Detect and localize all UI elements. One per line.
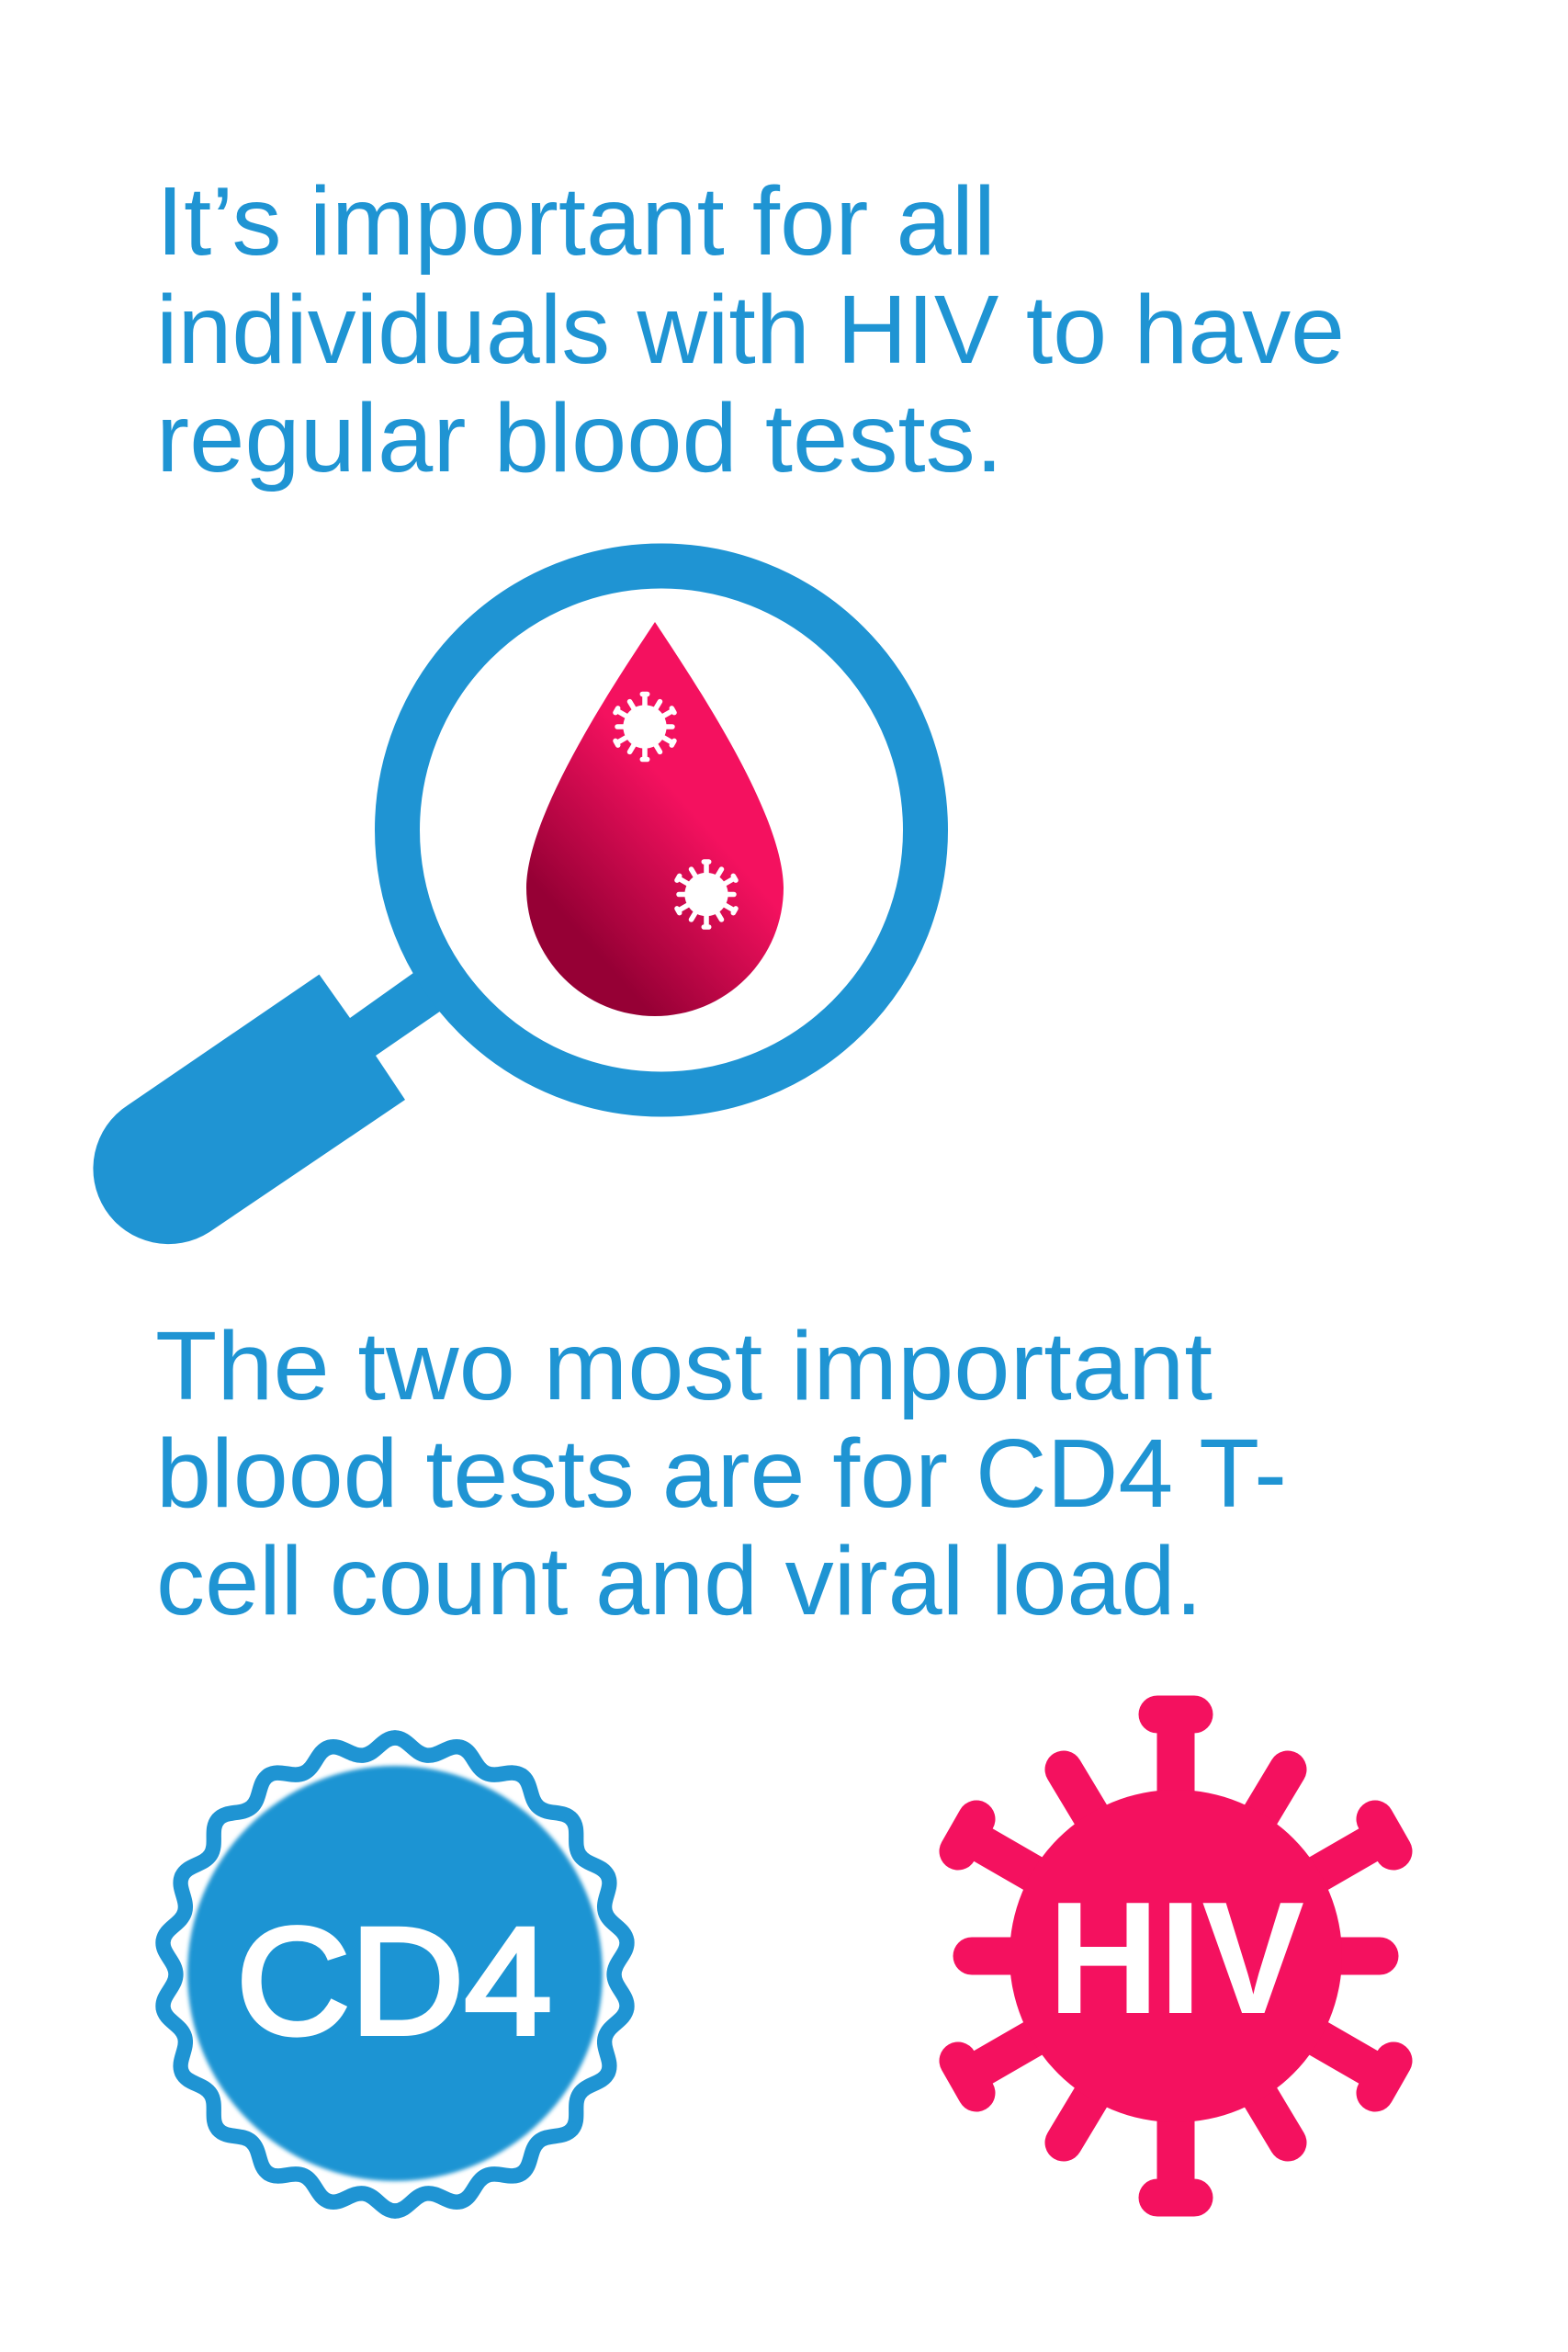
blood drop bbox=[526, 622, 784, 1016]
virus body bbox=[1010, 1790, 1342, 2122]
heading: regular blood tests: regular blood tests. bbox=[156, 384, 1003, 492]
heading: regular blood tests bbox=[156, 167, 1345, 492]
heading: regular blood tests: It’s important for all bbox=[156, 167, 996, 276]
HIV label: HIV bbox=[1048, 1868, 1304, 2047]
badge disc bbox=[187, 1766, 603, 2181]
icon: CD4 badge bbox=[153, 1729, 637, 2220]
virus spikes bbox=[958, 1714, 1393, 2198]
CD4 label: CD4 bbox=[236, 1896, 552, 2067]
text: two most important blood tests: The two most important bbox=[155, 1312, 1213, 1420]
text: two most important blood tests bbox=[155, 1312, 1287, 1635]
badge wavy outline bbox=[153, 1729, 637, 2220]
text: two most important blood tests: cell count and viral load. bbox=[156, 1527, 1202, 1635]
magnifying glass handle bbox=[93, 968, 446, 1244]
icon: small virus lower bbox=[677, 862, 736, 927]
text: two most important blood tests: blood tests are for CD4 T- bbox=[156, 1419, 1287, 1528]
icon: magnifying glass over blood drop bbox=[93, 566, 925, 1244]
heading: regular blood tests: individuals with HIV to have bbox=[156, 276, 1345, 384]
icon: small virus upper bbox=[615, 694, 674, 760]
magnifying glass lens ring bbox=[397, 566, 926, 1094]
icon: HIV virus bbox=[958, 1714, 1393, 2198]
